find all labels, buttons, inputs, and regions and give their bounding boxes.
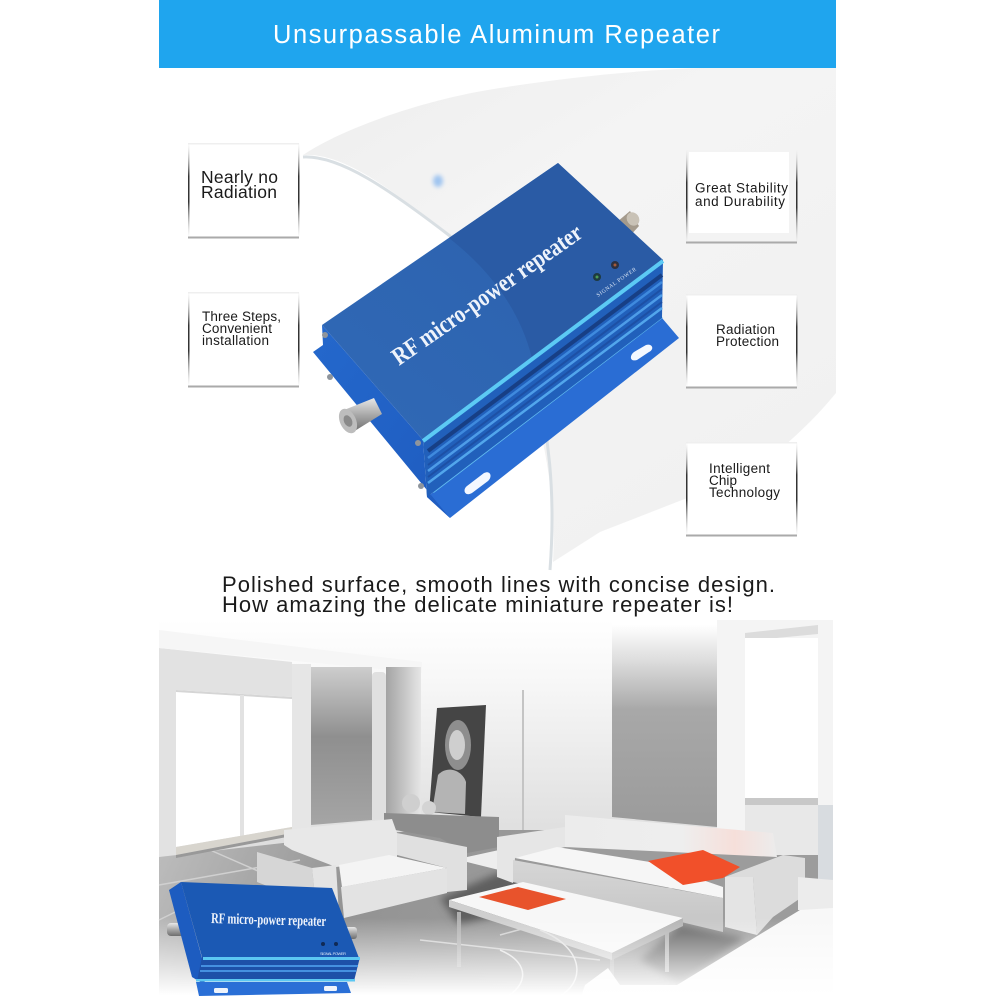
framed portrait bbox=[429, 705, 486, 817]
floor tile lines bbox=[159, 850, 700, 960]
highlight strip bbox=[423, 261, 663, 441]
title banner: Unsurpassable Aluminum Repeater bbox=[273, 21, 720, 49]
feature box: Nearly no Radiation: Nearly no bbox=[201, 167, 278, 187]
caption bbox=[222, 572, 775, 617]
feature box: Radiation Protection: Radiation bbox=[716, 322, 775, 337]
feature box: Great Stability: and Durability bbox=[695, 194, 785, 209]
bottom fade bbox=[159, 918, 833, 1000]
mounting bracket bbox=[427, 317, 679, 518]
decorative spheres bbox=[402, 794, 436, 815]
right connector bbox=[617, 210, 642, 238]
finned side bbox=[423, 260, 663, 497]
glass floor reflection bbox=[500, 930, 577, 1000]
foreground seat back bbox=[798, 877, 833, 913]
feature box: Intelligent Chip Technology: Technology bbox=[709, 485, 780, 500]
foreground white sofa bbox=[580, 908, 833, 1000]
left wall above window bbox=[159, 648, 292, 857]
ceiling beam bbox=[159, 630, 422, 673]
coffee table bbox=[449, 882, 683, 985]
feature box: Three Steps bbox=[188, 292, 300, 388]
large repeater product bbox=[313, 163, 679, 518]
living room scene bbox=[159, 620, 833, 1000]
LED legend: SIGNAL POWER bbox=[320, 951, 346, 956]
left face bbox=[313, 325, 450, 518]
feature box: Intelligent Chip Technology: Intelligent bbox=[709, 461, 770, 476]
top face bbox=[322, 163, 663, 440]
feature box: Three Steps: Convenient bbox=[202, 321, 272, 336]
screws bbox=[322, 332, 424, 489]
left window bbox=[176, 690, 292, 858]
background panel: antenna backdrop bbox=[303, 68, 836, 570]
top face bbox=[181, 882, 359, 958]
caption: How amazing the delicate miniature repeater is! bbox=[222, 592, 733, 617]
small repeater product bbox=[167, 882, 360, 996]
feature box: Intelligent Chip Technology: Chip bbox=[709, 473, 737, 488]
side connectors bbox=[167, 923, 193, 936]
floor shadows bbox=[440, 872, 745, 985]
finned front bbox=[196, 957, 360, 982]
floor bbox=[159, 830, 833, 1000]
left connector bbox=[335, 398, 382, 436]
feature box: Three Steps: installation bbox=[202, 333, 269, 348]
LED legend: SIGNAL POWER bbox=[596, 267, 638, 299]
bracket bbox=[196, 982, 351, 996]
feature box: Great Stability: Great Stability bbox=[695, 180, 788, 196]
console table bbox=[384, 813, 499, 853]
caption: Polished surface, smooth lines with concise design. bbox=[222, 572, 775, 597]
right grey pillar bbox=[612, 620, 717, 827]
feature box: Nearly no Radiation: Radiation bbox=[201, 182, 277, 202]
LEDs bbox=[321, 942, 338, 946]
right window bbox=[717, 620, 833, 880]
red tray bbox=[479, 887, 566, 910]
room walls bbox=[159, 620, 833, 860]
left side face bbox=[169, 882, 205, 985]
feature box: Nearly no Radiation bbox=[188, 143, 300, 238]
feature box: Radiation Protection: Protection bbox=[716, 334, 779, 349]
feature box: Three Steps: Three Steps, bbox=[202, 309, 281, 324]
feature box: Great Stability bbox=[686, 150, 798, 244]
product label: RF micro-power repeater bbox=[387, 219, 588, 371]
floor strip behind table bbox=[467, 850, 499, 870]
red cushion bbox=[648, 850, 740, 885]
sofa bbox=[497, 815, 805, 935]
indicator LEDs bbox=[593, 261, 619, 281]
floor lamp pole bbox=[522, 690, 524, 830]
top face shade beyond antenna arc bbox=[449, 163, 663, 358]
armchair bbox=[257, 819, 467, 918]
grey wall panels bbox=[292, 664, 421, 829]
feature box: Radiation Protection bbox=[686, 294, 798, 388]
title banner bbox=[159, 0, 836, 68]
product label: RF micro-power repeater bbox=[211, 911, 327, 930]
feature box: Intelligent Chip Technology bbox=[686, 442, 798, 536]
